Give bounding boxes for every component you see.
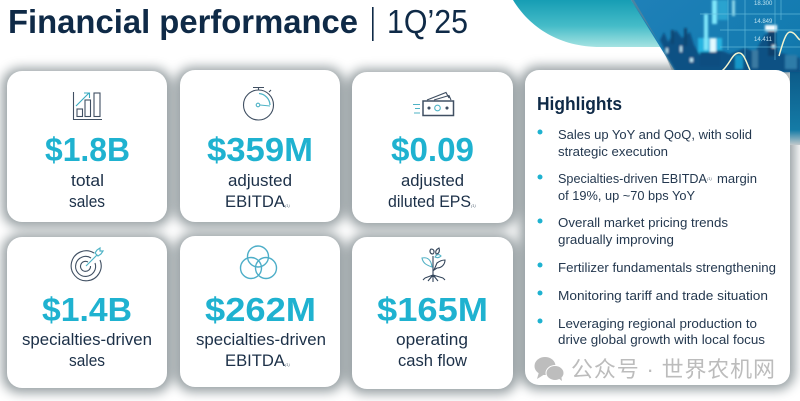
metric: $1.8B: $1.8B: [45, 131, 130, 168]
label: total sales: total: [71, 171, 104, 190]
icon: bar chart: [74, 92, 102, 120]
title: Financial performance: [8, 3, 358, 40]
label: adjusted EBITDA: (1): [285, 203, 291, 208]
icon: overlapping circles: [240, 246, 276, 278]
city financial image: [631, 0, 800, 145]
label: total sales: [69, 171, 105, 211]
label: specialties-driven EBITDA: [196, 330, 326, 370]
city financial image: 18.300: [754, 1, 773, 7]
card: adjusted EBITDA: [180, 70, 340, 222]
label: adjusted EBITDA: adjusted: [228, 171, 292, 190]
highlight text list: Leveraging regional production to: [558, 316, 757, 331]
highlight text list: Sales up YoY and QoQ, with solid: [558, 127, 752, 142]
title: 1Q’25: [387, 3, 468, 40]
label: total sales: sales: [69, 192, 105, 211]
metric: $1.4B: $1.4B: [42, 291, 132, 328]
decorative teal curve: [513, 0, 662, 47]
bullets: [538, 130, 542, 324]
card: operating cash flow: [352, 237, 513, 389]
card: specialties-driven EBITDA: [180, 236, 340, 387]
highlight text list: [558, 127, 776, 347]
highlight text list: Fertilizer fundamentals strengthening: [558, 260, 776, 275]
label: adjusted diluted EPS: (1): [471, 203, 477, 208]
highlight text list: drive global growth with local focus: [558, 332, 766, 347]
icon: chat bubbles: [534, 357, 564, 381]
label: specialties-driven EBITDA: EBITDA: [225, 351, 286, 370]
label: specialties-driven sales: [22, 330, 152, 370]
card: total sales: [7, 71, 167, 222]
city financial image: 14.849: [754, 19, 773, 25]
label: specialties-driven EBITDA: specialties-driven: [196, 330, 326, 349]
card: adjusted diluted EPS: [352, 72, 513, 223]
watermark: 公众号 · 世界农机网: [571, 357, 775, 382]
label: operating cash flow: cash flow: [398, 351, 468, 370]
highlight text list: Overall market pricing trends: [558, 215, 729, 230]
label: adjusted EBITDA: EBITDA: [225, 192, 286, 211]
metric: $0.09: $0.09: [391, 131, 474, 168]
label: specialties-driven EBITDA: (1): [285, 362, 291, 367]
highlight text list: Specialties-driven EBITDA: [558, 171, 707, 186]
icon: stopwatch: [244, 88, 274, 120]
label: adjusted diluted EPS: adjusted: [401, 171, 464, 190]
icon: money: [413, 92, 454, 116]
label: adjusted diluted EPS: [388, 171, 477, 211]
highlight text list: gradually improving: [558, 232, 674, 247]
metric: $359M: $359M: [207, 131, 313, 168]
label: specialties-driven sales: specialties-driven: [22, 330, 152, 349]
highlight text list: strategic execution: [558, 144, 668, 159]
label: specialties-driven sales: sales: [69, 351, 105, 370]
panel: highlights: [525, 70, 790, 385]
label: operating cash flow: operating: [396, 330, 468, 349]
city financial image: 14.411: [754, 37, 773, 43]
highlight text list: of 19%, up ~70 bps YoY: [558, 188, 695, 203]
icon: seedling: [422, 248, 445, 282]
highlight text list: Monitoring tariff and trade situation: [558, 288, 768, 303]
highlight text list: margin: [717, 171, 757, 186]
icon: target: [71, 248, 103, 281]
label: adjusted diluted EPS: diluted EPS: [388, 192, 471, 211]
label: operating cash flow: [396, 330, 468, 370]
highlight text list: (1): [707, 176, 713, 181]
heading: highlights: Highlights: [537, 94, 622, 114]
metric: $262M: $262M: [205, 291, 316, 328]
metric: $165M: $165M: [377, 291, 488, 328]
label: adjusted EBITDA: [225, 171, 292, 211]
card: specialties-driven sales: [7, 237, 167, 388]
